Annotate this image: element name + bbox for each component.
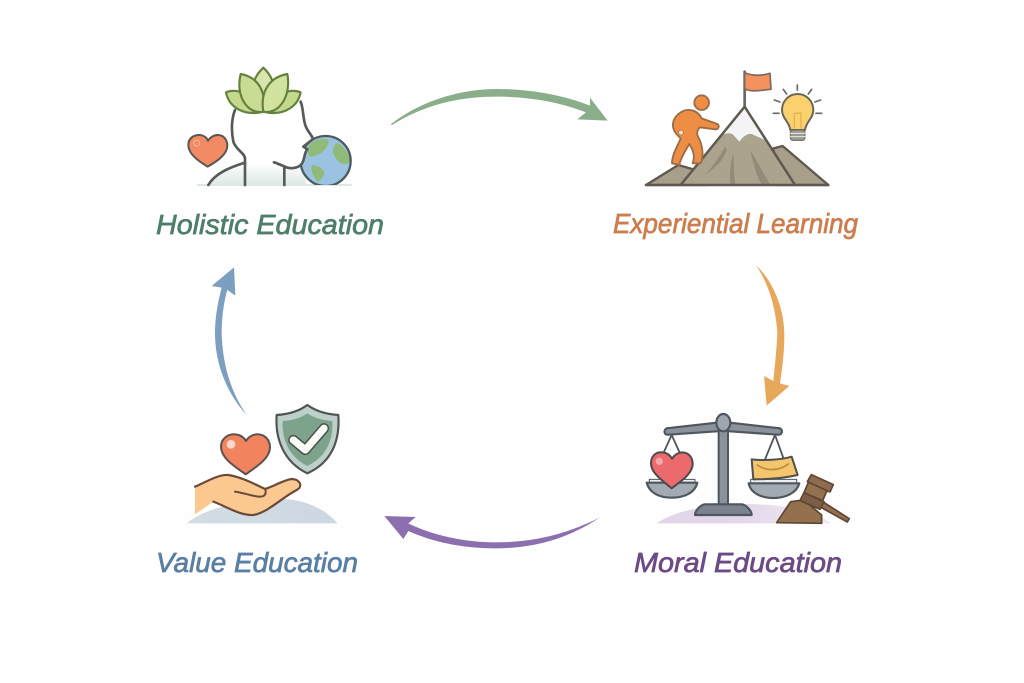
platform (657, 504, 831, 523)
lotus (226, 68, 301, 113)
title: moral education: Moral Education (634, 547, 842, 578)
shield (276, 405, 339, 473)
small peaks (773, 146, 828, 185)
base (695, 504, 752, 515)
platform (187, 499, 337, 523)
left plate (649, 479, 797, 484)
icon: value education (187, 405, 339, 523)
cycle diagram (156, 66, 858, 573)
globe (301, 136, 351, 186)
left heart (651, 452, 693, 488)
hand (195, 475, 300, 515)
climber (672, 95, 719, 165)
flag (741, 72, 749, 107)
heart (188, 135, 227, 167)
arrow: holistic to experiential (391, 89, 608, 125)
light bulb (782, 94, 813, 130)
head outline (208, 102, 313, 185)
gavel (777, 475, 849, 523)
arrow: value to holistic (212, 267, 247, 415)
arrow: experiential to moral (756, 265, 789, 406)
right pan (749, 483, 799, 498)
main peak (681, 107, 795, 185)
title: experiential learning: Experiential Learning (613, 208, 858, 239)
icon: holistic education (188, 68, 352, 186)
beam (665, 423, 782, 435)
icon: moral education (647, 414, 849, 523)
ground and chest shading (208, 162, 307, 185)
strings (655, 435, 788, 472)
title: value education: Value Education (156, 547, 358, 578)
title: holistic education: Holistic Education (156, 209, 384, 240)
icon: experiential learning (646, 72, 828, 185)
gold (752, 457, 798, 479)
left pan (647, 483, 697, 498)
heart (221, 434, 270, 474)
arrow: moral to value (384, 516, 600, 548)
column (719, 427, 728, 507)
head fill (232, 102, 313, 168)
check mark (293, 428, 324, 450)
